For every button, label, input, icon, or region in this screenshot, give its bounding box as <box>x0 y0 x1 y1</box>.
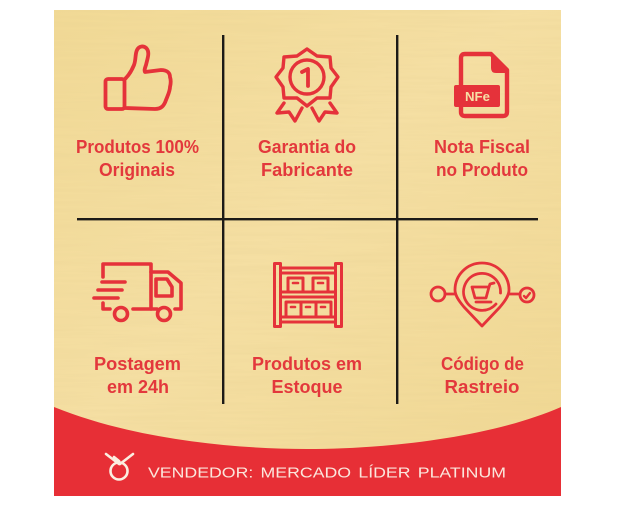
text: Produtos em Estoque <box>252 354 362 397</box>
grid dividers <box>77 35 538 404</box>
text: Código de Rastreio: Código de <box>441 354 524 374</box>
text: Garantia do Fabricante: Fabricante <box>261 160 353 180</box>
text: Nota Fiscal no Produto: Nota Fiscal <box>434 137 530 157</box>
text: seller line: VENDEDOR: MERCADO LÍDER PLATINUM <box>148 464 506 482</box>
icon: NFe document: NFe <box>465 90 490 104</box>
text: Garantia do Fabricante <box>258 137 356 180</box>
icon: seller badge <box>106 454 133 480</box>
text: Produtos em Estoque: Produtos em <box>252 354 362 374</box>
footer: red curved banner <box>54 407 561 496</box>
text: Nota Fiscal no Produto: no Produto <box>436 160 528 180</box>
text: Nota Fiscal no Produto <box>434 137 530 180</box>
icon: thumbs up <box>106 46 171 109</box>
icon: tracking pin <box>431 263 534 326</box>
text: Produtos 100% Originais: Produtos 100% <box>76 137 199 157</box>
text: Código de Rastreio <box>441 354 524 397</box>
panel: wood background <box>54 10 561 496</box>
text: Postagem em 24h <box>94 354 181 397</box>
text: Postagem em 24h: em 24h <box>107 377 169 397</box>
text: Postagem em 24h: Postagem <box>94 354 181 374</box>
icon: award ribbon <box>276 49 338 121</box>
text: Garantia do Fabricante: Garantia do <box>258 137 356 157</box>
text: Produtos em Estoque: Estoque <box>272 377 342 397</box>
text: Produtos 100% Originais: Originais <box>99 160 175 180</box>
text: Código de Rastreio: Rastreio <box>444 377 520 397</box>
icon: warehouse shelves <box>274 264 342 326</box>
icon: NFe document <box>454 53 509 116</box>
text: Produtos 100% Originais <box>76 137 199 180</box>
icon: delivery truck <box>94 264 181 320</box>
